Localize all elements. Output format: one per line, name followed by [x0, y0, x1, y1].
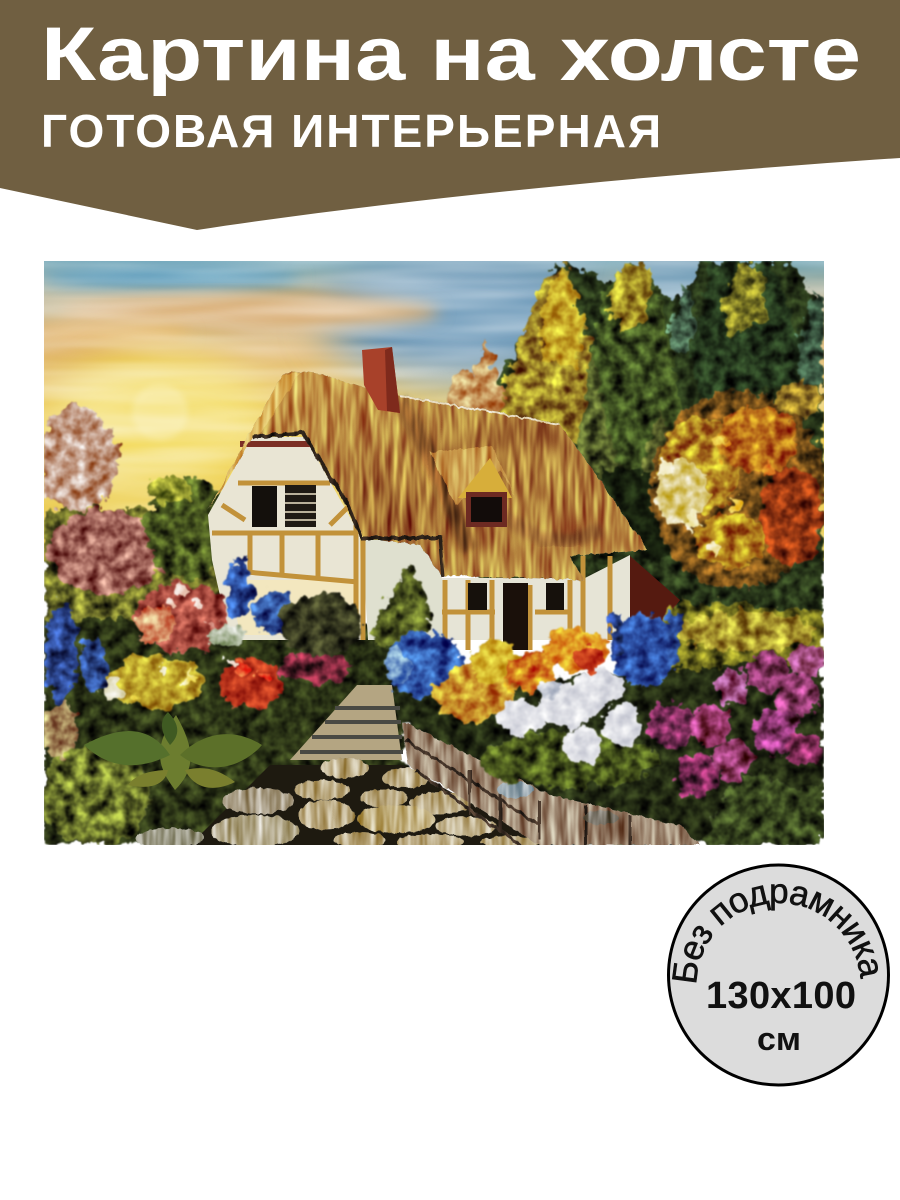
- far left pink tree and greenery: [38, 406, 404, 845]
- coral bush: [134, 583, 230, 651]
- pale cluster: [208, 624, 248, 648]
- unit: см: [757, 1021, 801, 1057]
- yellow cluster: [102, 656, 205, 708]
- ground base: [40, 600, 824, 847]
- climbing shrub by the wall: [375, 565, 429, 645]
- low stone wall: [402, 722, 700, 845]
- stone steps: [290, 685, 402, 760]
- size badge: [667, 864, 890, 1086]
- header banner: [0, 0, 900, 230]
- title: Картина на холсте: [41, 12, 861, 97]
- crimson cluster: [279, 653, 351, 683]
- blue flowers right of door: [611, 610, 680, 686]
- white lilies: [498, 671, 641, 764]
- sky with setting sun: [30, 245, 824, 561]
- magenta hydrangeas: [648, 642, 826, 797]
- flower beds on the left: [46, 560, 362, 709]
- chimney: [362, 347, 400, 413]
- broadleaf plant: [84, 712, 262, 790]
- blue delphiniums, far left: [46, 602, 109, 702]
- blue flowers centre: [384, 633, 465, 697]
- forest behind the cottage: [445, 261, 824, 620]
- subtitle: ГОТОВАЯ ИНТЕРЬЕРНАЯ: [41, 105, 661, 157]
- stepping-stone path: [136, 685, 545, 850]
- yellow and orange flowers: [433, 628, 607, 723]
- blue flowers by the wall: [227, 560, 297, 634]
- gable and lower windows: [252, 486, 277, 527]
- size: 130x100: [706, 975, 856, 1017]
- foliage below hydrangeas: [700, 770, 824, 845]
- autumn bush on the right: [650, 380, 826, 588]
- cottage walls: [208, 437, 680, 650]
- dormer window: [430, 446, 516, 505]
- cobblestones: [136, 758, 540, 850]
- curved label: Без подрамника: [672, 884, 878, 982]
- dark shrub: [278, 595, 362, 655]
- green under white flowers: [480, 732, 660, 788]
- painting: cottage in a flower garden: [30, 245, 826, 850]
- thatched roof: [208, 371, 648, 580]
- red cluster: [218, 656, 282, 709]
- flower beds at the doorstep: [384, 610, 826, 845]
- cottage: [208, 347, 680, 650]
- front door: [503, 583, 528, 650]
